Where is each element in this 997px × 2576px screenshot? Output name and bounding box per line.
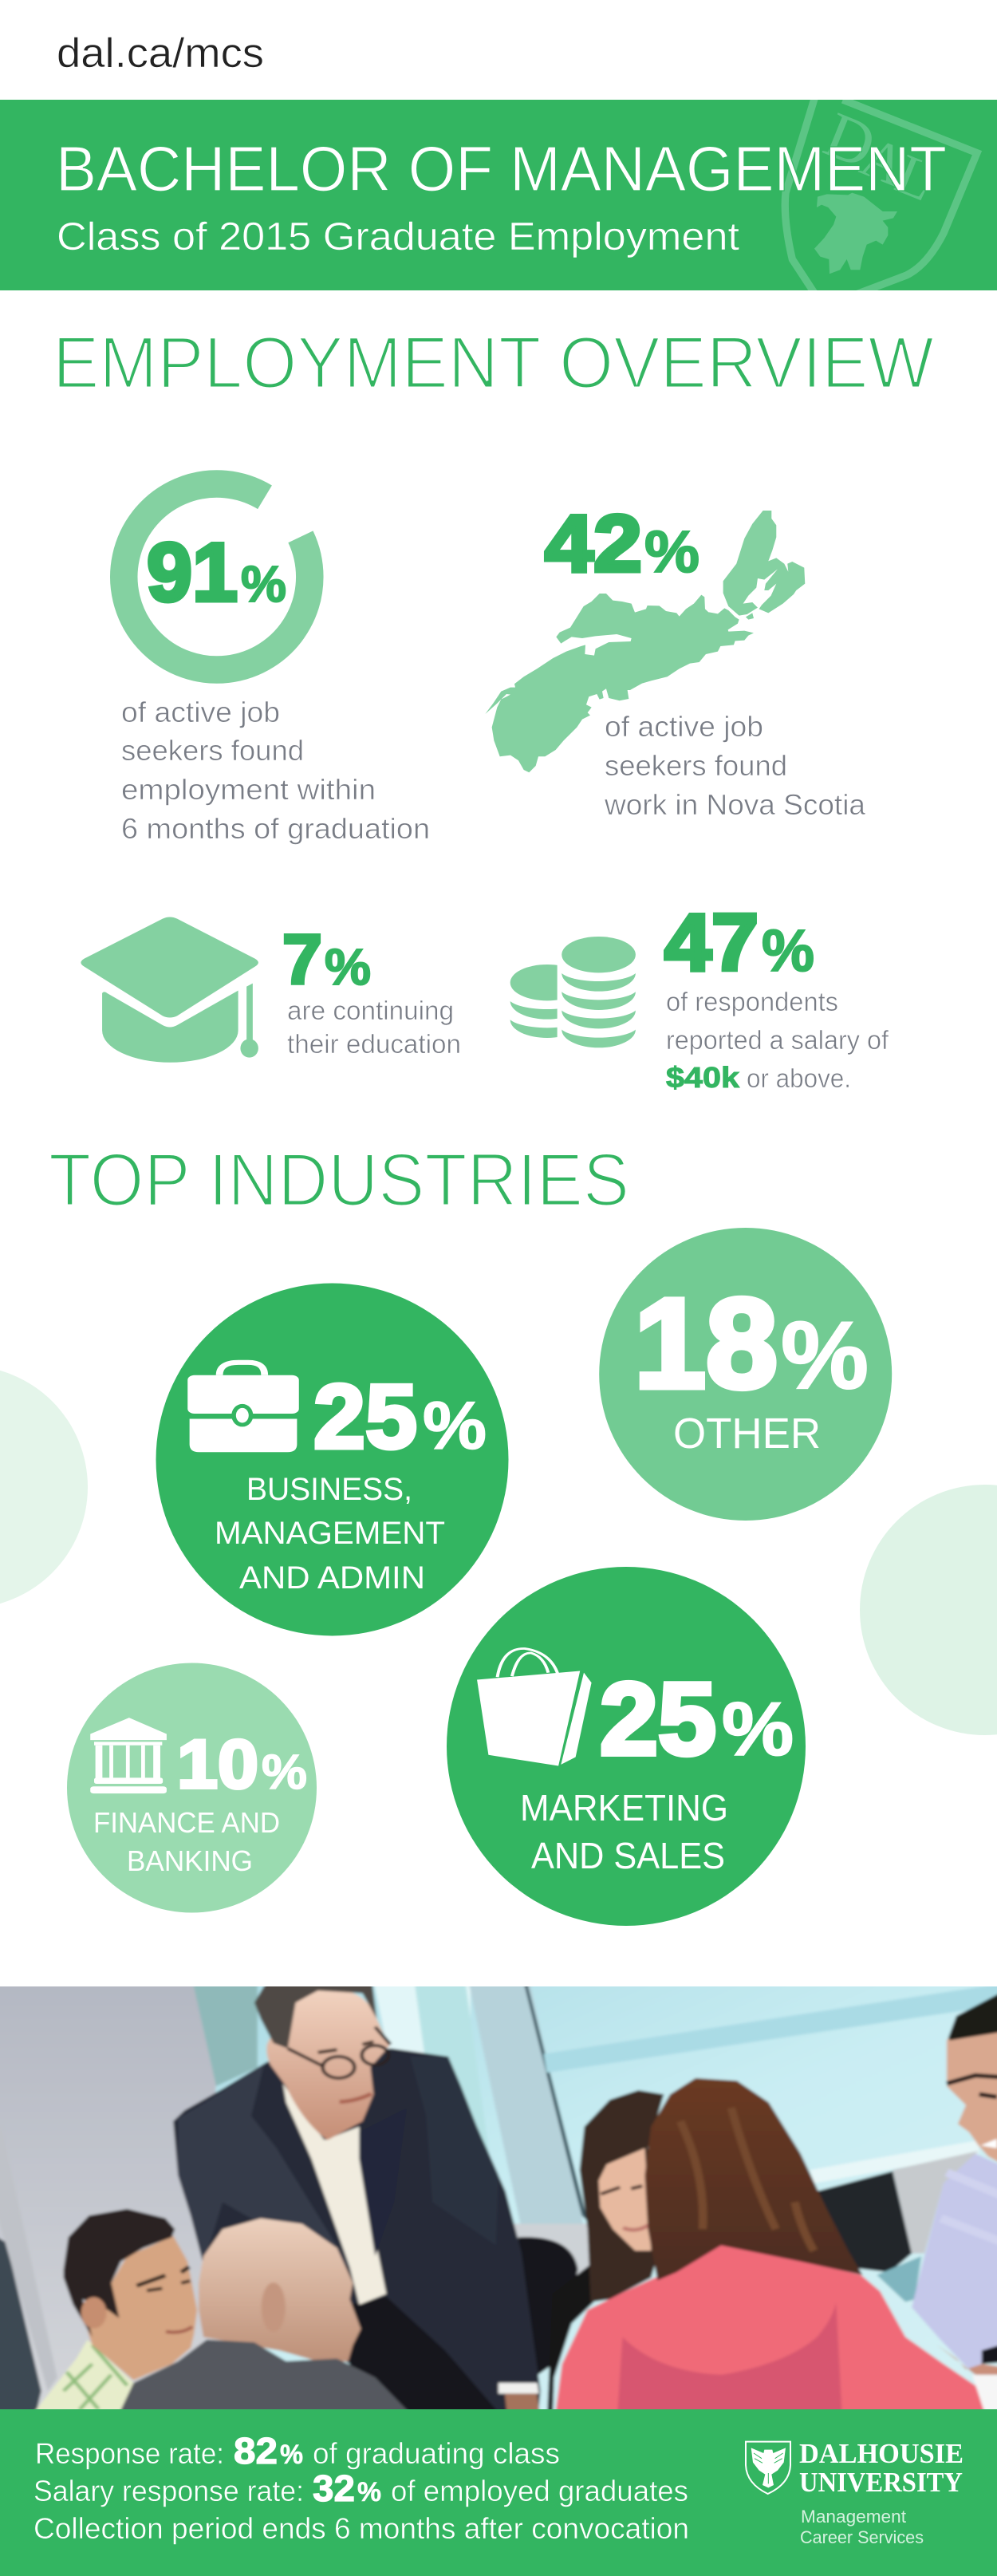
logo: Dalhousie University	[746, 2438, 964, 2547]
text: 47 percent description: or above.	[747, 1063, 851, 1093]
text: response rate: %	[280, 2440, 303, 2470]
young man	[33, 2340, 134, 2409]
decorative circle left	[0, 1366, 88, 1608]
number: 42%: 42	[545, 499, 642, 589]
number: 10%	[177, 1726, 307, 1803]
text: 47 percent description	[666, 987, 889, 1094]
panel: other	[599, 1228, 892, 1521]
text: 91 percent description: seekers found	[121, 734, 304, 767]
number: 18%: 18	[634, 1272, 778, 1414]
icon: faded crest: A	[853, 125, 915, 199]
number: 91%: %	[241, 555, 286, 613]
number: 7%: %	[325, 938, 371, 996]
heading: top industries: TOP INDUSTRIES	[49, 1138, 629, 1221]
label: finance and banking: FINANCE AND	[93, 1806, 280, 1839]
label: finance and banking	[93, 1806, 280, 1877]
number: 18%: %	[781, 1302, 869, 1409]
stat: 47 percent	[508, 898, 889, 1094]
text: salary response rate	[33, 2468, 688, 2509]
label: marketing and sales	[520, 1787, 728, 1876]
icon: faded crest	[785, 97, 977, 294]
number: 47%: 47	[664, 898, 759, 988]
label: business, management and admin	[215, 1472, 445, 1596]
panel: marketing	[447, 1567, 806, 1926]
text: response rate: 82	[234, 2430, 278, 2471]
logo: Dalhousie University: Management	[801, 2507, 906, 2527]
icon: Nova Scotia map	[485, 511, 805, 772]
number: 18%	[634, 1272, 869, 1414]
icon: bank	[90, 1718, 167, 1793]
text: collection period: Collection period ends 6 months after convocation	[33, 2512, 689, 2545]
stat: 42 percent	[485, 499, 866, 821]
man standing	[173, 2049, 541, 2424]
icon: graduation cap	[81, 917, 258, 1063]
text: 7 percent description: their education	[287, 1029, 461, 1059]
number: 10%: 10	[177, 1726, 258, 1803]
icon: coin stacks	[508, 937, 638, 1047]
logo: Dalhousie University: Career Services	[800, 2527, 924, 2547]
header band	[0, 97, 997, 294]
title: BACHELOR OF MANAGEMENT	[56, 133, 947, 204]
label: marketing and sales: AND SALES	[531, 1835, 725, 1876]
number: 25%	[600, 1662, 794, 1777]
decorative circle right	[860, 1485, 997, 1735]
number: 91%: 91	[147, 527, 238, 619]
label: finance and banking: BANKING	[127, 1844, 253, 1877]
icon: faded crest: D	[815, 97, 885, 183]
number: 47%	[664, 898, 814, 988]
text: response rate	[35, 2430, 560, 2471]
bald man	[199, 2219, 361, 2361]
stat: 7 percent	[81, 917, 461, 1063]
number: 25%: 25	[313, 1367, 417, 1468]
url: dal.ca/mcs	[57, 30, 264, 77]
woman facing	[547, 2264, 594, 2424]
number: 47%: %	[762, 917, 814, 984]
text: salary response rate: Salary response rate:	[33, 2475, 304, 2507]
text: 47 percent description: reported a salary of	[666, 1025, 889, 1055]
icon: faded crest: L	[887, 142, 943, 214]
text: 47 percent description: $40k	[666, 1061, 740, 1094]
number: 7%: 7	[282, 920, 322, 999]
panel: finance	[67, 1663, 317, 1913]
subtitle: Class of 2015 Graduate Employment	[57, 215, 739, 258]
text: response rate: Response rate:	[35, 2437, 224, 2470]
text: response rate: of graduating class	[313, 2437, 560, 2470]
text: 7 percent description: are continuing	[287, 996, 454, 1025]
text: salary response rate: %	[357, 2477, 381, 2507]
text: 42 percent description: of active job	[605, 710, 763, 743]
number: 10%: %	[262, 1745, 307, 1799]
text: 47 percent description: of respondents	[666, 987, 838, 1016]
number: 25%: %	[423, 1388, 487, 1463]
chart: ring	[124, 484, 309, 670]
number: 91%	[147, 527, 286, 619]
logo: Dalhousie University: UNIVERSITY	[799, 2467, 963, 2498]
text: 7 percent description	[287, 996, 461, 1059]
text: salary response rate: of employed graduates	[391, 2475, 688, 2507]
icon: shield	[746, 2442, 790, 2494]
number: 25%	[313, 1367, 487, 1468]
number: 42%: %	[644, 519, 699, 585]
label: business, management and admin: AND ADMIN	[239, 1560, 425, 1596]
man right	[912, 2154, 997, 2369]
icon: shopping bag	[477, 1648, 592, 1766]
footer band	[0, 2409, 997, 2576]
logo: Dalhousie University: DALHOUSIE	[799, 2438, 964, 2469]
photo: group meeting	[0, 1986, 997, 2409]
icon: briefcase	[187, 1363, 299, 1452]
label: business, management and admin: MANAGEMENT	[215, 1516, 445, 1551]
text: 91 percent description: of active job	[121, 696, 280, 728]
text: 42 percent description: work in Nova Scotia	[604, 788, 866, 821]
label: business, management and admin: BUSINESS,	[246, 1472, 412, 1507]
number: 25%: 25	[600, 1662, 716, 1777]
number: 25%: %	[722, 1687, 794, 1772]
text: 91 percent description: employment within	[121, 773, 376, 806]
text: 42 percent description	[604, 710, 866, 821]
number: 42%	[545, 499, 699, 589]
text: salary response rate: 32	[313, 2468, 355, 2509]
text: 91 percent description	[121, 696, 430, 845]
label: marketing and sales: MARKETING	[520, 1787, 728, 1828]
heading: employment overview: EMPLOYMENT OVERVIEW	[53, 322, 934, 404]
stat: 91 percent	[121, 484, 430, 845]
woman from behind	[554, 2243, 986, 2409]
panel: business	[156, 1283, 509, 1635]
text: 91 percent description: 6 months of graduation	[121, 812, 430, 845]
text: 42 percent description: seekers found	[605, 749, 787, 782]
label: other: OTHER	[673, 1410, 821, 1458]
number: 7%	[282, 920, 371, 999]
